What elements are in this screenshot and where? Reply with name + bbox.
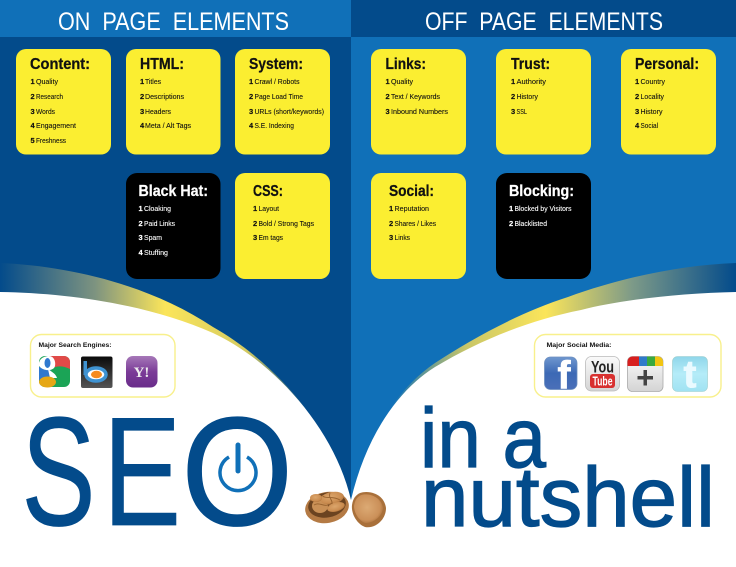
- icon: bing: [81, 356, 112, 388]
- panel: blocking: Blocked by Visitors: [514, 204, 572, 213]
- left header band: [0, 0, 351, 37]
- panel: system: System:: [249, 56, 303, 73]
- title: nutshell: nutshell: [421, 450, 715, 544]
- panel: links: Inbound Numbers: [391, 107, 448, 116]
- panel: html: HTML:: [140, 56, 184, 73]
- panel: social: [371, 173, 466, 279]
- panel: css: Layout: [258, 204, 280, 213]
- panel: black hat: 3: [138, 233, 143, 242]
- panel: html: 1: [140, 77, 144, 86]
- title: SEO: [22, 385, 294, 558]
- panel: social: 1: [389, 204, 393, 213]
- panel: black hat: Cloaking: [144, 204, 171, 213]
- panel: css: Bold / Strong Tags: [258, 219, 314, 228]
- social media label: Major Social Media:: [546, 342, 612, 349]
- right gold swoosh: [351, 263, 736, 500]
- icon: walnut half with kernel: [303, 488, 351, 527]
- panel: content: 5: [30, 136, 35, 145]
- panel: system: Crawl / Robots: [254, 77, 300, 86]
- panel: black hat: 2: [138, 219, 143, 228]
- panel: trust: Authority: [516, 77, 546, 86]
- panel: content: 3: [30, 107, 35, 116]
- panel: social: 2: [389, 219, 393, 228]
- right header band: [351, 0, 736, 37]
- panel: personal: Personal:: [635, 56, 699, 73]
- icon: empty walnut shell: [352, 492, 386, 527]
- panel: trust: 1: [511, 77, 515, 86]
- title: SEO: O: [181, 385, 294, 558]
- icon: google plus: [628, 356, 663, 392]
- panel: blocking: 1: [509, 204, 513, 213]
- icon: twitter: t: [684, 354, 697, 396]
- panel: personal: Social: [640, 121, 658, 130]
- panel: social: Shares / Likes: [394, 219, 436, 228]
- icon: power symbol: [220, 445, 256, 491]
- panel: css: 2: [253, 219, 257, 228]
- panel: css: Em tags: [258, 233, 283, 242]
- panel: html: 4: [140, 121, 145, 130]
- panel: black hat: [126, 173, 220, 279]
- panel: blocking: [496, 173, 591, 279]
- left blue background: [0, 0, 351, 505]
- panel: system: 3: [249, 107, 253, 116]
- search engines label: Major Search Engines:: [38, 342, 112, 349]
- panel: social: Links: [394, 233, 410, 242]
- panel: content: 4: [30, 121, 36, 130]
- icon: twitter: [672, 354, 708, 396]
- panel: system: Page Load Time: [254, 92, 303, 101]
- panel: trust: SSL: [516, 107, 527, 116]
- icon: google: [39, 356, 70, 388]
- panel: css: 3: [253, 233, 257, 242]
- panel: personal: 4: [635, 121, 640, 130]
- heading: off page elements: OFF PAGE ELEMENTS: [425, 8, 663, 36]
- panel: html: Titles: [145, 77, 161, 86]
- panel: blocking: Blocking:: [509, 183, 574, 200]
- white lower area: [0, 292, 736, 567]
- panel: content: Engagement: [36, 121, 77, 130]
- panel: system: 2: [249, 92, 253, 101]
- panel: personal: 2: [635, 92, 639, 101]
- panel: trust: Trust:: [511, 56, 550, 73]
- panel: personal: Country: [640, 77, 665, 86]
- panel: content: 2: [30, 92, 35, 101]
- panel: html: 3: [140, 107, 144, 116]
- panel: links: [371, 49, 466, 154]
- panel: system: 4: [249, 121, 254, 130]
- panel: social: 3: [389, 233, 393, 242]
- panel: content: Content:: [30, 56, 90, 73]
- panel: css: 1: [253, 204, 257, 213]
- panel: black hat: 1: [138, 204, 143, 213]
- panel: system: 1: [249, 77, 253, 86]
- icon: yahoo: [126, 356, 158, 388]
- icon: facebook: f: [558, 354, 572, 398]
- panel: trust: History: [516, 92, 538, 101]
- panel: links: Text / Keywords: [391, 92, 440, 101]
- panel: blocking: Blacklisted: [514, 219, 547, 228]
- panel: html: Headers: [145, 107, 171, 116]
- title: SEO: S: [22, 385, 96, 558]
- panel: trust: 3: [511, 107, 515, 116]
- panel: html: Meta / Alt Tags: [145, 121, 191, 130]
- panel: html: 2: [140, 92, 144, 101]
- panel: content: Freshness: [36, 136, 66, 145]
- left gold swoosh: [0, 263, 351, 500]
- icon: facebook: [544, 354, 577, 398]
- panel: personal: 1: [635, 77, 639, 86]
- panel: trust: [496, 49, 591, 154]
- heading: on page elements: ON PAGE ELEMENTS: [58, 8, 289, 36]
- icon: youtube: [586, 356, 620, 391]
- panel: content: Words: [36, 107, 55, 116]
- panel: links: 1: [386, 77, 390, 86]
- panel: content: Quality: [36, 77, 58, 86]
- panel: content: 1: [30, 77, 35, 86]
- panel: system: URLs (short/keywords): [254, 107, 324, 116]
- icon: youtube: You: [591, 358, 614, 376]
- panel: system: S.E. Indexing: [254, 121, 294, 130]
- panel: major search engines: [30, 334, 175, 397]
- icon: youtube: Tube: [592, 374, 613, 388]
- panel: personal: 3: [635, 107, 639, 116]
- icon: yahoo: Y!: [134, 365, 149, 381]
- panel: personal: Locality: [640, 92, 664, 101]
- panel: black hat: Paid Links: [144, 219, 175, 228]
- panel: content: Research: [36, 92, 63, 101]
- panel: links: 3: [386, 107, 390, 116]
- panel: content: [16, 49, 111, 154]
- panel: black hat: Spam: [144, 233, 162, 242]
- panel: personal: [621, 49, 716, 154]
- panel: css: CSS:: [253, 183, 283, 200]
- title: SEO: E: [103, 385, 181, 558]
- panel: links: Links:: [386, 56, 426, 73]
- panel: black hat: Black Hat:: [138, 183, 208, 200]
- panel: social: Social:: [389, 183, 434, 200]
- panel: blocking: 2: [509, 219, 513, 228]
- right blue background: [351, 0, 736, 505]
- panel: social: Reputation: [394, 204, 429, 213]
- panel: css: [235, 173, 330, 279]
- panel: personal: History: [640, 107, 663, 116]
- panel: html: Descriptions: [145, 92, 184, 101]
- panel: html: [126, 49, 220, 154]
- panel: links: 2: [386, 92, 390, 101]
- panel: black hat: Stuffing: [144, 248, 168, 257]
- panel: black hat: 4: [138, 248, 144, 257]
- panel: trust: 2: [511, 92, 515, 101]
- panel: links: Quality: [391, 77, 413, 86]
- panel: system: [235, 49, 330, 154]
- panel: major social media: [534, 334, 721, 398]
- title: in a: in a: [420, 391, 546, 485]
